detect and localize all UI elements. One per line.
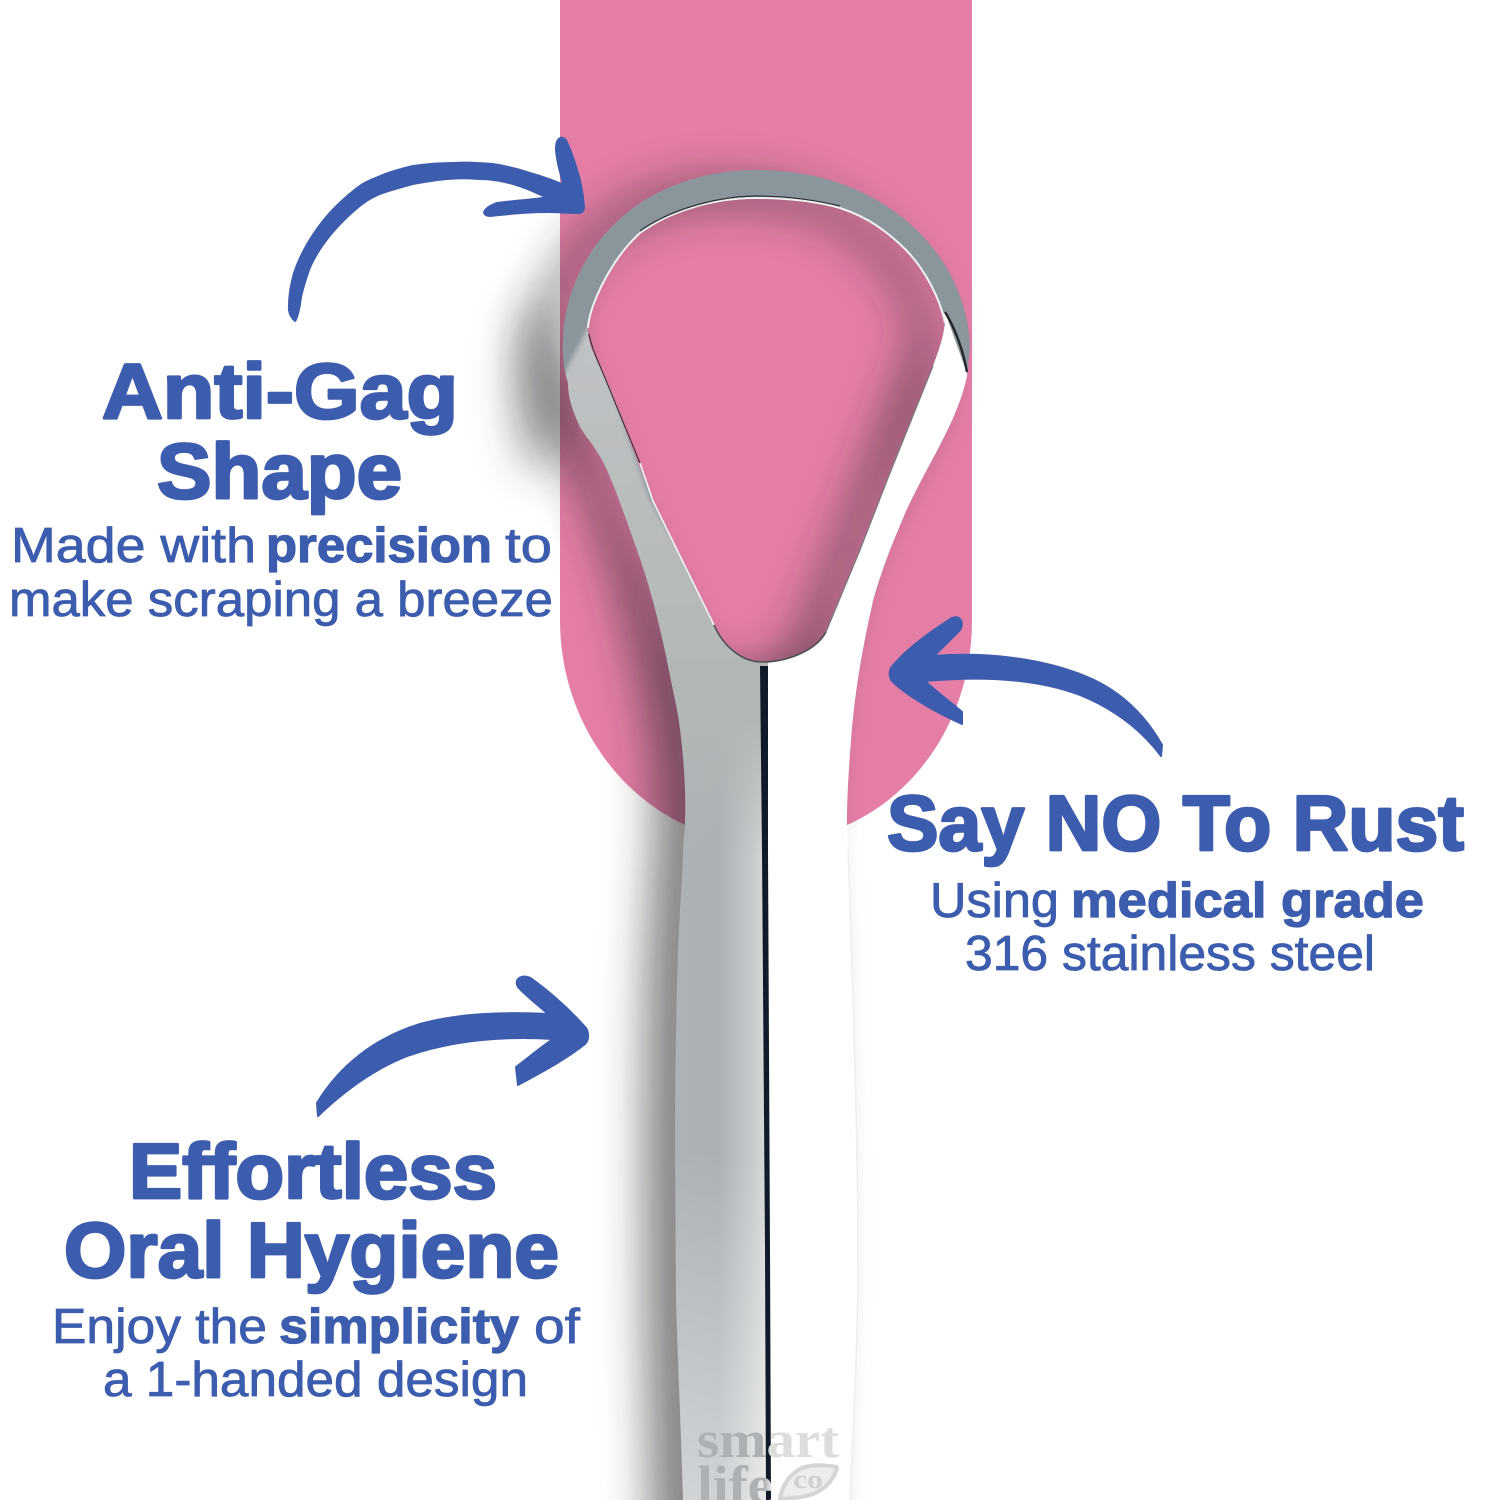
text block: rust description: Using	[930, 874, 1059, 928]
heading: Effortless Oral Hygiene: Oral Hygiene	[64, 1206, 559, 1294]
text block: effortless description: Enjoy the	[52, 1300, 267, 1354]
center groove	[760, 666, 771, 1500]
logo watermark: smart	[697, 1412, 840, 1469]
text block: effortless description: simplicity	[279, 1300, 519, 1354]
tool drop shadow	[531, 178, 938, 1500]
heading: Anti-Gag Shape: Shape	[157, 427, 402, 515]
heading: Anti-Gag Shape	[102, 347, 458, 515]
heading: Say NO To Rust: Say NO To Rust	[887, 779, 1464, 867]
heading: Effortless Oral Hygiene	[64, 1127, 559, 1294]
text block: anti-gag description	[9, 519, 553, 627]
panel: pink background	[560, 0, 972, 825]
text block: effortless description: of	[534, 1300, 580, 1354]
text block: anti-gag description: precision	[266, 519, 492, 573]
text block: rust description: 316 stainless steel	[965, 927, 1375, 981]
text block: anti-gag description: to	[505, 519, 552, 573]
text block: rust description	[930, 874, 1424, 981]
arrow: to scraper head	[288, 137, 585, 322]
text block: anti-gag description: Made with	[11, 519, 256, 573]
text block: effortless description: a 1-handed design	[103, 1353, 528, 1407]
text block: anti-gag description: make scraping a breeze	[9, 573, 553, 627]
text block: rust description: medical grade	[1071, 874, 1424, 928]
logo watermark: co	[793, 1465, 823, 1494]
product: stainless steel tongue scraper	[550, 160, 980, 1500]
right edge highlight	[848, 850, 858, 1500]
head shadow accent	[512, 300, 564, 476]
heading: Anti-Gag Shape: Anti-Gag	[102, 347, 458, 435]
logo watermark	[697, 1412, 840, 1500]
heading: Effortless Oral Hygiene: Effortless	[129, 1127, 497, 1215]
arrow: to rust-proof steel	[890, 617, 1162, 756]
text block: effortless description	[52, 1300, 580, 1407]
arrow: to handle	[317, 977, 588, 1116]
